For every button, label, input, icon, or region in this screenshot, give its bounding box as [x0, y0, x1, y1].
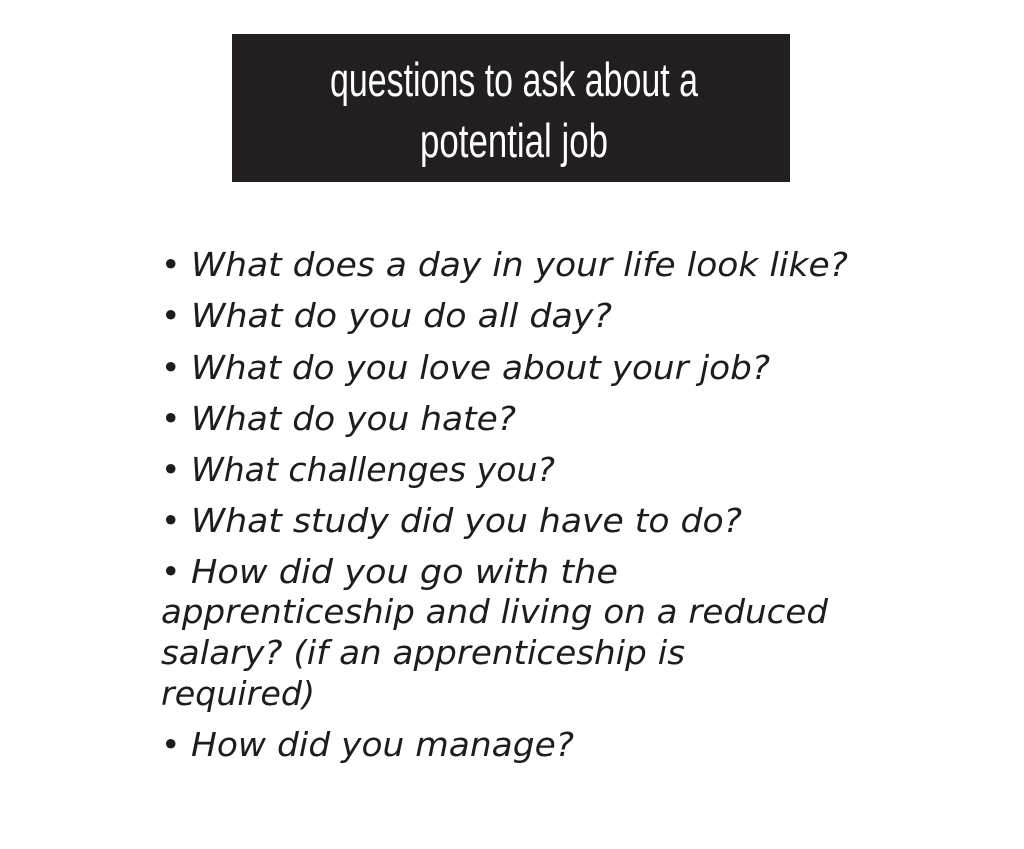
- question 4: •: [161, 399, 180, 438]
- question 5: What challenges you?: [191, 450, 555, 489]
- question 8: How did you manage?: [191, 725, 574, 764]
- question 7: salary? (if an apprenticeship is: [161, 633, 685, 672]
- question 4: What do you hate?: [191, 399, 516, 438]
- question 2: •: [161, 296, 180, 335]
- question 7: required): [161, 674, 315, 713]
- question list: [161, 245, 848, 764]
- question 6: What study did you have to do?: [191, 501, 742, 540]
- question 6: •: [161, 501, 180, 540]
- title line 2: potential job: [420, 114, 608, 167]
- question 7: [161, 552, 829, 713]
- question 7: How did you go with the: [191, 552, 618, 591]
- question 8: •: [161, 725, 180, 764]
- question 1: •: [161, 245, 180, 284]
- question 7: •: [161, 552, 180, 591]
- question 7: apprenticeship and living on a reduced: [161, 592, 829, 631]
- title banner: [232, 34, 790, 182]
- question 2: What do you do all day?: [191, 296, 612, 335]
- question 3: What do you love about your job?: [191, 348, 770, 387]
- title line 1: questions to ask about a: [330, 53, 699, 106]
- question 1: What does a day in your life look like?: [191, 245, 848, 284]
- question 5: •: [161, 450, 180, 489]
- question 3: •: [161, 348, 180, 387]
